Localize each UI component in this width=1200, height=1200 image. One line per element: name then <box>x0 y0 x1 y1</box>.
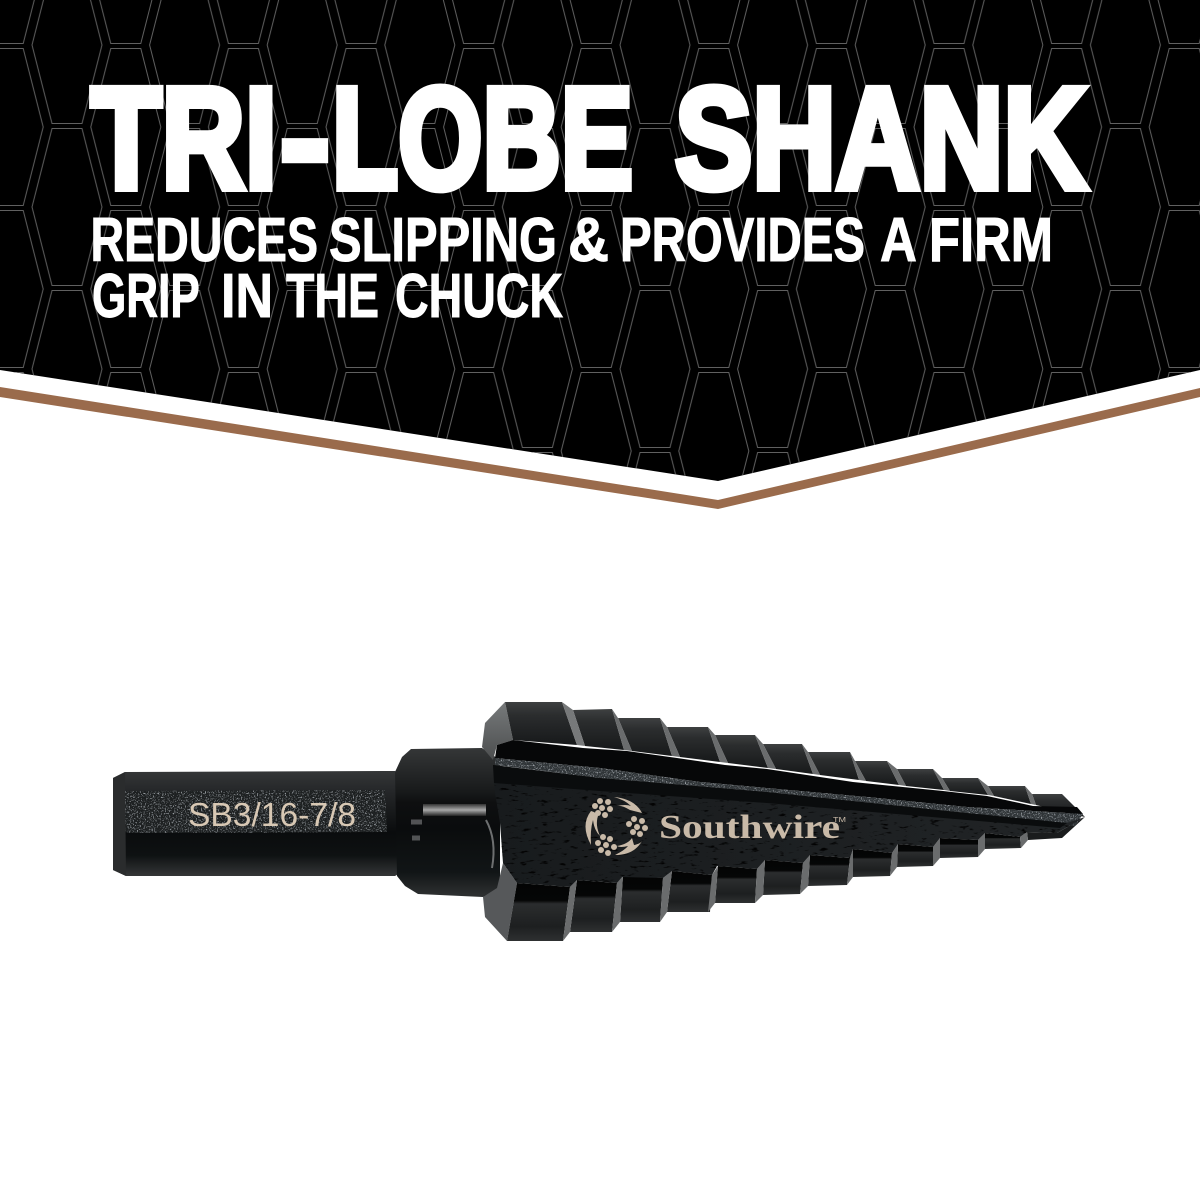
title: - <box>280 58 330 219</box>
trademark: TM <box>833 817 846 824</box>
subtitle line 1: SLIPPING <box>329 206 557 275</box>
subtitle line 2: CHUCK <box>395 262 563 331</box>
subtitle line 1: REDUCES <box>90 206 318 275</box>
header banner <box>0 0 1200 509</box>
shank size marking: SB3/16-7/8 <box>188 796 356 833</box>
engraved shank flat <box>114 790 387 833</box>
collar <box>395 748 500 897</box>
shank end chamfer <box>113 772 126 876</box>
flat face of the bit <box>493 765 1085 887</box>
copper chevron stripe <box>0 387 1200 509</box>
lower cutting steps <box>507 817 1085 941</box>
logo ring mark <box>586 797 648 856</box>
flute groove <box>495 740 1083 814</box>
upper cutting steps <box>505 702 1085 817</box>
shadow band under the land <box>493 765 1067 828</box>
subtitle line 2: THE <box>286 262 379 331</box>
subtitle line 2: IN <box>221 262 273 331</box>
flange bevels <box>482 702 517 941</box>
title: LOBE <box>332 58 633 219</box>
title: TRI <box>91 58 277 219</box>
black chevron panel with hexagon pattern <box>0 0 1200 481</box>
logo wordmark: Southwire <box>659 809 840 846</box>
subtitle line 2: GRIP <box>92 262 199 331</box>
collar highlight <box>423 804 486 816</box>
flute land <box>495 758 1083 826</box>
subtitle line 1: PROVIDES <box>620 206 865 275</box>
subtitle line 1: A <box>880 206 916 275</box>
title: SHANK <box>675 58 1087 219</box>
Southwire logo <box>586 797 846 856</box>
subtitle line 1: & <box>568 206 609 275</box>
product photo: step drill bit <box>113 702 1085 941</box>
hex shank <box>113 771 402 876</box>
subtitle line 1: FIRM <box>929 206 1053 275</box>
